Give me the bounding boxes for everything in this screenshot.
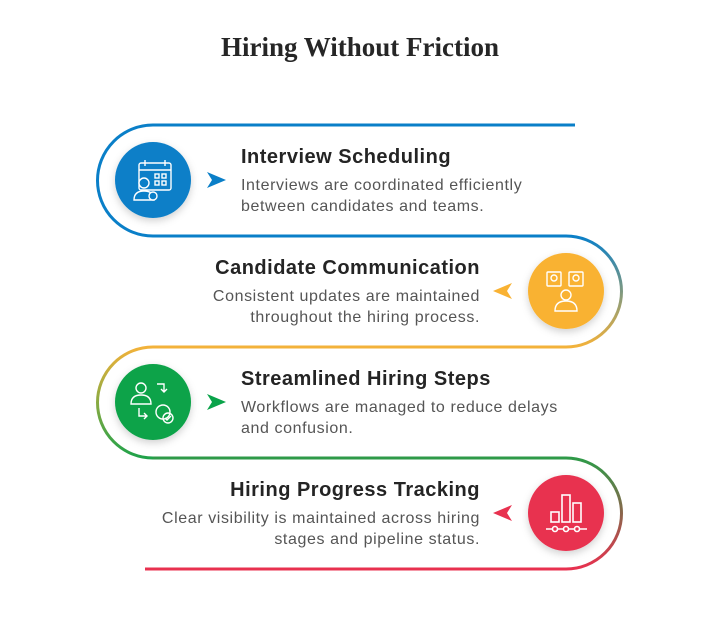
- icon: workflow steps: [115, 364, 191, 440]
- text: candidate communication: Consistent updates are maintained: [213, 288, 480, 305]
- text: hiring progress tracking: [162, 479, 480, 548]
- text: interview scheduling: [241, 146, 522, 215]
- icon: calendar scheduling: [115, 142, 191, 218]
- text: candidate communication: [213, 257, 480, 326]
- arrow 3: [207, 394, 226, 410]
- text: interview scheduling: Interview Scheduling: [241, 146, 451, 168]
- arrow 1: [207, 172, 226, 188]
- title: Hiring Without Friction: [221, 32, 499, 62]
- icon: progress chart: [528, 475, 604, 551]
- text: interview scheduling: between candidates and teams.: [241, 198, 484, 215]
- text: streamlined hiring steps: Streamlined Hiring Steps: [241, 368, 491, 390]
- text: candidate communication: throughout the hiring process.: [250, 309, 480, 326]
- text: streamlined hiring steps: Workflows are managed to reduce delays: [241, 399, 558, 416]
- arrow 4: [493, 505, 512, 521]
- text: streamlined hiring steps: [241, 368, 558, 437]
- text: streamlined hiring steps: and confusion.: [241, 420, 353, 437]
- icon: communication: [528, 253, 604, 329]
- text: hiring progress tracking: stages and pipeline status.: [274, 531, 480, 548]
- text: candidate communication: Candidate Communication: [215, 257, 480, 279]
- text: interview scheduling: Interviews are coordinated efficiently: [241, 177, 522, 194]
- text: hiring progress tracking: Hiring Progress Tracking: [230, 479, 480, 501]
- text: hiring progress tracking: Clear visibility is maintained across hiring: [162, 510, 480, 527]
- arrow 2: [493, 283, 512, 299]
